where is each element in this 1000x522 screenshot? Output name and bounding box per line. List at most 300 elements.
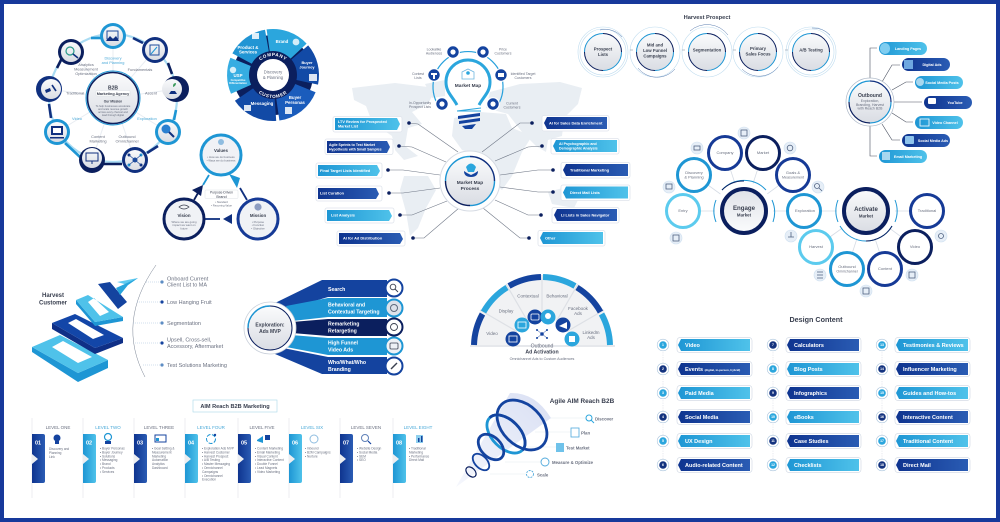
prospect labels: Low Funnel <box>643 48 667 53</box>
brand label <box>205 190 238 208</box>
wheel labels: Measurement <box>74 66 99 72</box>
panel: market map process <box>316 116 630 246</box>
brand label: Purpose-Driven <box>210 190 233 194</box>
level lists: • Video Marketing <box>255 470 280 474</box>
node labels: Video <box>910 244 921 249</box>
level lists: • Brand <box>100 462 111 466</box>
wheel labels: Fundamentals <box>128 67 152 72</box>
activate hub <box>836 182 897 241</box>
level lists: Direct Mail <box>409 458 424 462</box>
wheel labels: Journey <box>299 64 315 70</box>
level lists: • Performance <box>409 454 429 458</box>
level lists: • Traditional <box>409 446 426 450</box>
numbered markers <box>657 339 888 471</box>
funnel steps: Scale <box>537 472 549 478</box>
band: high funnel <box>286 335 387 355</box>
level lists: • B2M Campaigns <box>305 450 331 454</box>
panel: exploration ads MVP <box>244 280 402 374</box>
values circle: • How we do business <box>207 155 235 159</box>
ad network icon <box>536 329 548 339</box>
panel: engage and activate market <box>663 127 947 297</box>
band: search: Search <box>328 287 345 293</box>
column 1: Paid Media <box>685 391 715 397</box>
level tabs: 02 <box>86 440 92 446</box>
list dots and labels <box>133 276 227 369</box>
vision circle <box>164 199 204 239</box>
column 1: Social Media <box>685 415 719 421</box>
node labels: Entry <box>678 208 688 213</box>
left label: agile sprints: Hypothesis with Small Samples <box>329 148 382 152</box>
right label: psychographic: AI Psychographic and <box>559 142 597 146</box>
right label: other <box>538 230 605 246</box>
wheel labels: Ascent <box>145 90 158 96</box>
bulb labels: Prospect Lists <box>409 105 431 109</box>
numbered markers: 1 <box>662 343 664 347</box>
process hub: Process <box>461 186 480 192</box>
wheel labels: Analytics <box>78 62 94 67</box>
numbered markers: 13 <box>880 343 884 347</box>
level lists: • Nurture <box>305 454 318 458</box>
activate hub: Market <box>859 214 874 218</box>
bulb outline <box>446 60 490 129</box>
prospect labels: A/B Testing <box>799 48 823 52</box>
brand label: • Standard <box>215 200 228 204</box>
panel: company customer wheel: CUSTOMER <box>259 91 287 98</box>
level lists: Measurement <box>152 450 172 454</box>
panel: company customer wheel: & Planning <box>263 75 284 80</box>
band: search <box>275 280 387 310</box>
panel: market map light bulb: Market Map <box>455 83 481 89</box>
levels title <box>193 400 277 412</box>
left label: list curation <box>316 186 382 201</box>
ad labels: Facebook <box>568 306 589 311</box>
wheel labels <box>229 39 315 106</box>
level lists: • Interactive Content <box>255 458 284 462</box>
ad labels: Ads <box>587 335 596 340</box>
right label: psychographic <box>551 138 619 154</box>
left label: final target lists: Final Target Lists Identified <box>320 168 371 173</box>
node labels: Goals & <box>786 170 800 175</box>
level headings: LEVEL FOUR <box>197 425 226 430</box>
level lists: • Social Media <box>357 450 377 454</box>
panel: harvest prospect <box>578 15 836 77</box>
harvest customer title: Harvest <box>42 293 64 299</box>
funnel steps: Measure & Optimize <box>552 460 594 465</box>
level tabs: 08 <box>396 440 402 446</box>
level headings: LEVEL SEVEN <box>351 425 381 430</box>
wheel labels: Video <box>72 116 82 121</box>
node labels: Company <box>716 150 734 155</box>
wheel hub <box>86 71 140 125</box>
funnel title: Agile AIM Reach B2B <box>550 398 615 405</box>
level lists: Automation <box>152 458 168 462</box>
bulb labels: Current <box>506 102 518 106</box>
left label: LTV review <box>333 116 402 132</box>
numbered markers: 6 <box>662 463 664 467</box>
funnel cone <box>456 393 551 487</box>
prospect circles <box>578 27 836 77</box>
numbered markers: 7 <box>772 343 774 347</box>
wheel labels: USP <box>233 73 243 78</box>
band: branding: Branding <box>328 367 351 373</box>
engage hub: Market <box>737 212 752 218</box>
node labels: Outbound <box>838 264 856 269</box>
node labels <box>678 150 936 274</box>
outbound hub: with Reach B2B <box>858 107 883 111</box>
mission circle: • Purpose <box>252 220 265 224</box>
level tabs: 05 <box>241 440 247 446</box>
wheel hub: lead through digital <box>102 113 124 117</box>
funnel steps: Plan <box>581 430 590 436</box>
level lists <box>49 446 429 482</box>
bulb labels: Identified Target <box>511 72 535 76</box>
left label: AI ad distribution <box>337 231 405 246</box>
right label: AI sales data: AI for Sales Data Enrichment <box>549 120 603 126</box>
wheel hub: To help businesses accelerate <box>96 104 131 108</box>
node labels: Content <box>878 266 893 271</box>
band: branding <box>275 348 387 374</box>
node labels: Measurement <box>782 176 804 180</box>
wheel labels: Competitive <box>231 78 246 82</box>
column 1: Events (digital, in-person, hybrid) <box>685 367 740 373</box>
node labels: Market <box>757 150 770 155</box>
level lists: Analytics <box>152 462 165 466</box>
level lists: • Exploration Ads MVP <box>202 446 234 450</box>
wheel labels: Outbound <box>118 134 136 139</box>
band icons <box>386 280 402 374</box>
outbound hub: Exploration, <box>861 99 879 103</box>
numbered markers: 12 <box>771 463 775 467</box>
vision circle: future <box>180 226 188 230</box>
wheel hub: across every channel and <box>98 110 128 114</box>
outbound pills: Video Channel <box>932 121 958 125</box>
ad labels: Behavioral <box>546 294 568 298</box>
numbered markers: 2 <box>662 367 664 371</box>
wheel labels: Marketing <box>89 138 107 144</box>
right label: traditional marketing: Traditional Marketing <box>570 168 610 172</box>
levels title: AIM Reach B2B Marketing <box>200 404 270 410</box>
level lists: • Messaging <box>100 458 118 462</box>
left label: LTV review: LTV Review for Prospected <box>338 120 388 124</box>
ad labels: Display <box>499 308 514 314</box>
level lists: • Email Marketing <box>255 450 280 454</box>
level lists: • SEM <box>357 454 366 458</box>
wheel labels: Omnichannel <box>116 138 139 144</box>
level lists: • Harvest Customer <box>202 450 231 454</box>
panel: design content <box>657 315 970 472</box>
column 3: Testimonies & Reviews <box>903 343 964 349</box>
wheel hub: and scale revenue growth <box>98 107 128 111</box>
column 3: Direct Mail <box>903 463 931 469</box>
band: behavioral <box>286 298 387 321</box>
surrounding nodes <box>666 136 944 286</box>
panel: outbound ad activation <box>470 275 615 361</box>
column 3 <box>895 338 970 472</box>
column 2: Infographics <box>794 391 827 397</box>
bulb labels: Audiences <box>426 52 442 56</box>
wheel labels: Brand <box>276 39 289 44</box>
level lists: • Master Messaging <box>202 462 230 466</box>
bulb labels: Lookalike <box>427 48 441 52</box>
funnel rings <box>464 390 557 479</box>
right label: LI lists: LI Lists in Sales Navigator <box>561 212 610 218</box>
column 1: Video <box>685 343 701 349</box>
panel: agile AIM reach B2B funnel <box>456 390 615 487</box>
ad labels: Ads <box>574 311 583 316</box>
vision circle: impact we want on <box>172 223 196 227</box>
ad activation title: Omnichannel Ads to Custom Audiences <box>510 357 575 361</box>
band: remarketing: Retargeting <box>328 328 357 334</box>
bulb icons <box>428 46 507 110</box>
wheel labels: Differentiation <box>229 81 247 85</box>
outbound pills: Social Media Ads <box>918 139 948 143</box>
level lists: • Inbound <box>305 446 319 450</box>
outbound hub <box>846 78 894 126</box>
ad labels <box>486 294 600 340</box>
level tabs: 07 <box>343 440 349 446</box>
left label: LTV review: Market List <box>338 124 359 128</box>
level lists: Marketing <box>152 454 166 458</box>
level tabs: 04 <box>188 440 195 446</box>
panel: outbound <box>846 42 972 163</box>
brand label: Brand <box>216 195 227 199</box>
process hub <box>440 151 500 211</box>
list dots and labels: Accessory, Aftermarket <box>167 344 224 350</box>
exploration hub: Ads MVP <box>259 329 281 335</box>
level lists: • Products <box>100 466 115 470</box>
node labels: Traditional <box>918 208 936 213</box>
panel: company customer wheel: Discovery <box>264 70 283 74</box>
funnel steps: Test Market <box>566 446 590 450</box>
prospect labels: Prospect <box>594 46 613 52</box>
panel: world map background <box>352 80 582 236</box>
node labels: & Planning <box>684 174 704 180</box>
band: branding: Who/What/Who <box>328 360 366 366</box>
left label: list curation: List Curation <box>320 190 345 196</box>
column 1 <box>677 338 752 472</box>
wheel nodes <box>36 23 189 173</box>
mission circle: • Objective <box>251 226 265 230</box>
bulb labels <box>409 48 535 110</box>
column 3: Interactive Content <box>903 415 953 421</box>
level lists: • Website Design <box>357 446 381 450</box>
outbound hub: Outbound <box>858 93 882 99</box>
numbered markers: 10 <box>771 415 775 419</box>
numbered markers: 5 <box>662 439 664 443</box>
left label: agile sprints <box>325 139 393 154</box>
wheel labels: Discovery <box>104 56 122 60</box>
wheel labels: Personas <box>285 100 305 105</box>
harvest customer title <box>39 293 68 306</box>
level lists: Link <box>49 455 55 459</box>
values circle: • Ways we do business <box>207 158 236 162</box>
level lists: • Buyer Journey <box>100 450 123 454</box>
level lists: • Omnichannel <box>202 474 223 478</box>
band: remarketing: Remarketing <box>328 322 359 328</box>
level lists: • Visual Content <box>255 454 278 458</box>
column 3: Guides and How-tos <box>903 391 956 397</box>
numbered markers: 3 <box>662 391 664 395</box>
column 3: Traditional Content <box>903 439 953 445</box>
ad activation title: Ad Activation <box>525 350 559 356</box>
prospect labels: Sales Focus <box>745 52 771 56</box>
exploration hub <box>244 302 296 354</box>
mission circle: Mission <box>250 213 266 218</box>
column 2: Checklists <box>794 463 822 469</box>
level lists: • Content Marketing <box>255 446 283 450</box>
numbered markers: 14 <box>880 367 884 371</box>
node labels: Discovery <box>685 170 703 175</box>
connector lines <box>388 123 553 238</box>
numbered markers: 17 <box>880 439 884 443</box>
numbered markers: 15 <box>880 391 884 395</box>
ad labels: Contextual <box>517 294 539 298</box>
outbound pills: Email Marketing <box>894 155 922 159</box>
ad labels: Video <box>486 331 498 336</box>
bulb labels: Customers <box>495 52 512 56</box>
funnel steps <box>526 415 613 478</box>
panel: harvest customer <box>32 265 227 382</box>
wheel labels: Optimization <box>75 71 97 76</box>
bulb labels: In-Opportunity <box>409 101 431 105</box>
left label: list analysis <box>325 208 394 223</box>
column 2 <box>786 338 861 472</box>
panel: AIM Reach B2B marketing levels <box>32 400 433 498</box>
panel: company customer wheel: COMPANY <box>259 52 287 60</box>
node labels: Exploration <box>795 208 815 213</box>
prospect labels: Mid and <box>647 42 663 48</box>
level tabs: 01 <box>35 440 41 446</box>
level lists: Execution <box>202 478 216 482</box>
bulb labels: Lists <box>414 76 422 80</box>
band: high funnel: Video Ads <box>328 348 353 354</box>
values circle <box>201 135 241 175</box>
prospect labels: Segmentation <box>693 48 722 52</box>
list dots and labels: Client List to MA <box>167 282 207 288</box>
right label: LI lists <box>552 208 619 223</box>
bulb labels: Contest <box>412 72 424 76</box>
column 2: Case Studies <box>794 439 829 445</box>
right label: direct mail: Direct Mail Lists <box>570 190 600 195</box>
prospect labels: Primary <box>750 46 767 51</box>
wheel labels: Buyer <box>289 95 302 100</box>
numbered markers: 8 <box>772 367 774 371</box>
funnel steps: Discover <box>595 416 613 422</box>
ad labels: LinkedIn <box>582 330 600 335</box>
wheel segments <box>227 29 319 121</box>
level headings: LEVEL THREE <box>144 425 174 430</box>
brand label: • Recurring Value <box>211 204 232 208</box>
prospect labels: Lists <box>598 52 609 57</box>
list dots and labels: Test Solutions Marketing <box>167 363 227 369</box>
exploration hub: Exploration: <box>255 322 285 328</box>
left label: list analysis: List Analysis <box>331 212 355 218</box>
level lists: • A/B Testing <box>202 458 220 462</box>
list dots and labels: Onboard Current <box>167 276 209 282</box>
right label: traditional marketing <box>561 162 630 178</box>
level lists: • Lead Magnets <box>255 466 278 470</box>
level icons <box>54 434 423 444</box>
numbered markers: 11 <box>771 439 775 443</box>
left label: AI ad distribution: AI for Ad Distribution <box>343 236 383 240</box>
level headings: LEVEL FIVE <box>249 425 275 430</box>
arc segments <box>474 277 610 345</box>
wheel labels: Exploration <box>137 116 157 121</box>
ad activation title: Outbound <box>531 344 554 350</box>
wheel labels: Traditional <box>66 90 84 96</box>
numbered markers: 4 <box>662 415 664 419</box>
wheel labels: Services <box>239 50 258 54</box>
harvest customer title: Customer <box>39 300 68 306</box>
mission circle: • Function <box>252 223 265 227</box>
level lists: • Services <box>100 470 115 474</box>
numbered markers: 18 <box>880 463 884 467</box>
left label: final target lists <box>316 163 382 178</box>
process hub: Market Map <box>457 180 483 186</box>
wheel labels <box>66 56 158 144</box>
prospect labels: Campaigns <box>643 54 667 58</box>
level lists: Dashboard <box>152 466 168 470</box>
node labels: Omnichannel <box>836 270 858 274</box>
stacked steps <box>32 278 138 382</box>
wheel hub: B2B <box>108 86 118 92</box>
column 2: eBooks <box>794 415 814 421</box>
level lists: Discovery and <box>49 447 69 451</box>
column 2: Calculators <box>794 343 824 349</box>
level headings <box>46 425 433 430</box>
wheel labels: Messaging <box>251 101 274 106</box>
level lists: • Harvest Prospect <box>202 454 229 458</box>
wheel labels: Product & <box>238 45 259 50</box>
node labels: Harvest <box>809 244 824 249</box>
band: remarketing <box>292 319 387 336</box>
level lists: Campaigns <box>202 470 219 474</box>
band: behavioral: Contextual Targeting <box>328 310 380 316</box>
outbound pills: YouTube <box>947 101 963 105</box>
panel: company customer wheel <box>227 29 319 121</box>
panel: purpose-driven brand triangle <box>164 135 278 239</box>
level headings: LEVEL ONE <box>46 425 70 430</box>
level headings: LEVEL EIGHT <box>404 425 433 430</box>
band: behavioral: Behavioral and <box>328 302 365 308</box>
level lists: • Solutions <box>100 454 116 458</box>
outbound pills <box>879 42 972 163</box>
outbound pills: Digital Ads <box>922 63 942 67</box>
engage hub <box>714 180 775 240</box>
engage hub: Engage <box>733 205 756 212</box>
wheel labels: and Planning <box>102 60 124 65</box>
level tabs <box>32 434 406 483</box>
panel: B2B marketing agency wheel <box>36 23 189 173</box>
column 1: Audio-related Content <box>685 463 743 469</box>
right label: direct mail <box>561 185 630 200</box>
ad icons <box>506 310 580 346</box>
level lists: • Buyer Personas <box>100 446 125 450</box>
column 3: Influencer Marketing <box>903 367 957 373</box>
level lists: • Omnichannel <box>202 466 223 470</box>
prospect labels <box>594 42 823 58</box>
band: high funnel: High Funnel <box>328 340 359 346</box>
harvest prospect title: Harvest Prospect <box>684 15 730 21</box>
level headings: LEVEL SIX <box>301 425 323 430</box>
wheel labels: Content <box>91 134 106 139</box>
outbound pills: Landing Pages <box>895 47 921 51</box>
level lists: • Double Funnel <box>255 462 278 466</box>
level lists: Planning <box>49 451 62 455</box>
outbound hub: Branding, Harvest <box>856 103 884 107</box>
bulb labels: Customers <box>504 106 521 110</box>
panel: market map light bulb <box>409 46 535 129</box>
